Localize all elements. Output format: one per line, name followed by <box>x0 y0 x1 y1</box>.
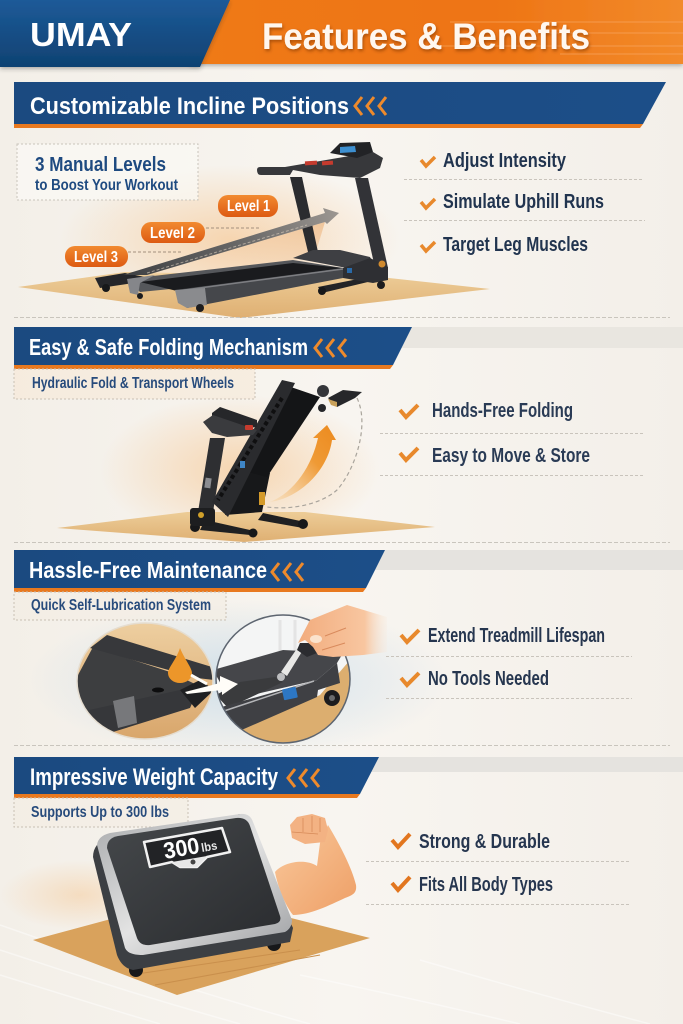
benefit list: Simulate Uphill Runs <box>443 191 604 213</box>
benefit list: No Tools Needed <box>428 668 549 690</box>
callout: 3 manual levels <box>17 144 198 200</box>
subheading box: Supports Up to 300 lbs <box>31 804 169 821</box>
oil drop <box>168 648 192 683</box>
section heading banner: Easy & Safe Folding Mechanism <box>29 334 308 360</box>
benefit list <box>366 831 630 904</box>
subheading box <box>14 592 226 620</box>
panel: weight capacity <box>14 757 683 995</box>
floor <box>33 895 370 995</box>
section heading banner <box>14 757 379 798</box>
process arrow <box>185 675 238 695</box>
main title: Features & Benefits <box>262 16 590 57</box>
subheading box: Hydraulic Fold & Transport Wheels <box>32 375 234 392</box>
panel: folding <box>14 327 683 542</box>
incline arrow <box>123 208 339 275</box>
incline shading <box>147 222 325 275</box>
magnified circle: oil port <box>70 620 216 742</box>
header band <box>0 0 683 67</box>
section heading banner: Impressive Weight Capacity <box>30 764 279 791</box>
benefit list: Fits All Body Types <box>419 874 553 896</box>
curved lift arrow <box>270 425 336 502</box>
scale readout 300 lbs <box>144 828 230 867</box>
pill: level 1: Level 1 <box>227 198 270 215</box>
benefit list <box>404 150 645 256</box>
magnified circle: applying oil <box>213 612 352 747</box>
pill: level 3: Level 3 <box>74 249 118 266</box>
subheading box <box>14 798 188 827</box>
logo: UMAY <box>30 16 132 53</box>
benefit list <box>380 400 645 476</box>
subheading box <box>14 369 255 399</box>
header orange panel <box>190 0 683 64</box>
panel: maintenance <box>14 550 683 747</box>
subheading box: Quick Self-Lubrication System <box>31 597 211 614</box>
benefit list: Extend Treadmill Lifespan <box>428 625 605 647</box>
floor <box>57 512 435 542</box>
benefit list: Hands-Free Folding <box>432 400 573 422</box>
pill: level 1 <box>218 195 278 217</box>
scale <box>93 814 293 977</box>
folded treadmill <box>190 380 362 538</box>
benefit list: Strong & Durable <box>419 831 550 853</box>
benefit list <box>386 625 632 698</box>
dashed arc <box>267 398 362 508</box>
section heading banner: Customizable Incline Positions <box>30 93 349 120</box>
pill: level 3 <box>65 246 128 267</box>
floor <box>18 272 490 318</box>
panel: incline <box>14 82 670 318</box>
treadmill <box>95 142 388 312</box>
benefit list: Target Leg Muscles <box>443 234 588 256</box>
scale readout 300 lbs: 300 <box>161 832 201 864</box>
section heading banner: Hassle-Free Maintenance <box>29 557 267 583</box>
pill: level 2 <box>141 222 205 243</box>
pill: level 2: Level 2 <box>150 225 195 242</box>
flexed arm <box>275 814 356 915</box>
scale readout 300 lbs: lbs <box>200 838 219 855</box>
benefit list: Easy to Move & Store <box>432 445 590 467</box>
hand with oil bottle <box>277 605 387 681</box>
section heading banner <box>14 550 385 592</box>
section heading banner <box>14 82 666 128</box>
header blue logo panel <box>0 0 230 67</box>
section heading banner <box>14 327 412 369</box>
callout: 3 manual levels: to Boost Your Workout <box>35 177 179 194</box>
callout: 3 manual levels: 3 Manual Levels <box>35 154 166 176</box>
benefit list: Adjust Intensity <box>443 150 567 172</box>
